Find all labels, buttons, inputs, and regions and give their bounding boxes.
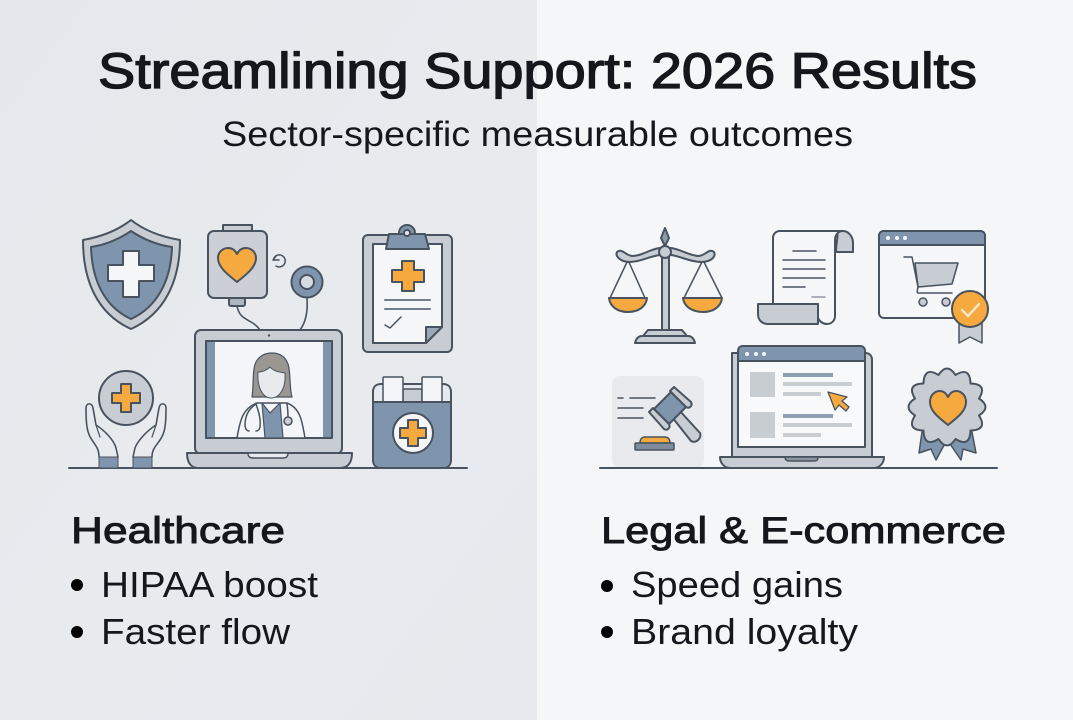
- heading: legal and e-commerce: Legal & E-commerce: [601, 510, 1006, 551]
- icon: heart rosette: [908, 368, 986, 460]
- bullet: Faster flow: Faster flow: [101, 611, 291, 652]
- icon: shopping cart browser: [879, 231, 988, 343]
- gavel panel: [612, 376, 704, 468]
- ground line: legal: [600, 467, 997, 469]
- icon: laptop with web page: [720, 346, 884, 468]
- panel: left background: [0, 0, 537, 720]
- icon: doctor on laptop: [187, 330, 352, 468]
- icon: gavel: [618, 387, 700, 450]
- bullet: Speed gains: Speed gains: [631, 564, 843, 605]
- title: Streamlining Support: 2026 Results: [98, 43, 977, 99]
- icon: legal scroll: [758, 231, 853, 324]
- verified badge: [952, 291, 988, 343]
- heading: healthcare: Healthcare: [71, 510, 285, 551]
- illustration: healthcare: [69, 220, 467, 468]
- icon: scales of justice: [609, 228, 722, 343]
- doctor figure: [237, 353, 305, 438]
- icon: medical bag: [373, 377, 451, 468]
- illustration: legal and e-commerce: [600, 228, 997, 468]
- text block: healthcare: [71, 510, 318, 652]
- bullet: Brand loyalty: Brand loyalty: [631, 611, 858, 652]
- icon: heart IV bag: [208, 225, 267, 330]
- icon: sensor: [292, 266, 322, 330]
- icon: shield with cross: [83, 220, 180, 329]
- bullet: HIPAA boost: HIPAA boost: [101, 564, 318, 605]
- ground line: healthcare: [69, 467, 467, 469]
- icon: caring hands with cross: [86, 371, 166, 468]
- text block: legal and e-commerce: [601, 510, 1006, 652]
- panel: right background: [537, 0, 1073, 720]
- icon: clipboard: [363, 225, 452, 352]
- subtitle: Sector-specific measurable outcomes: [222, 115, 853, 154]
- icon: refresh arrow: [273, 255, 285, 267]
